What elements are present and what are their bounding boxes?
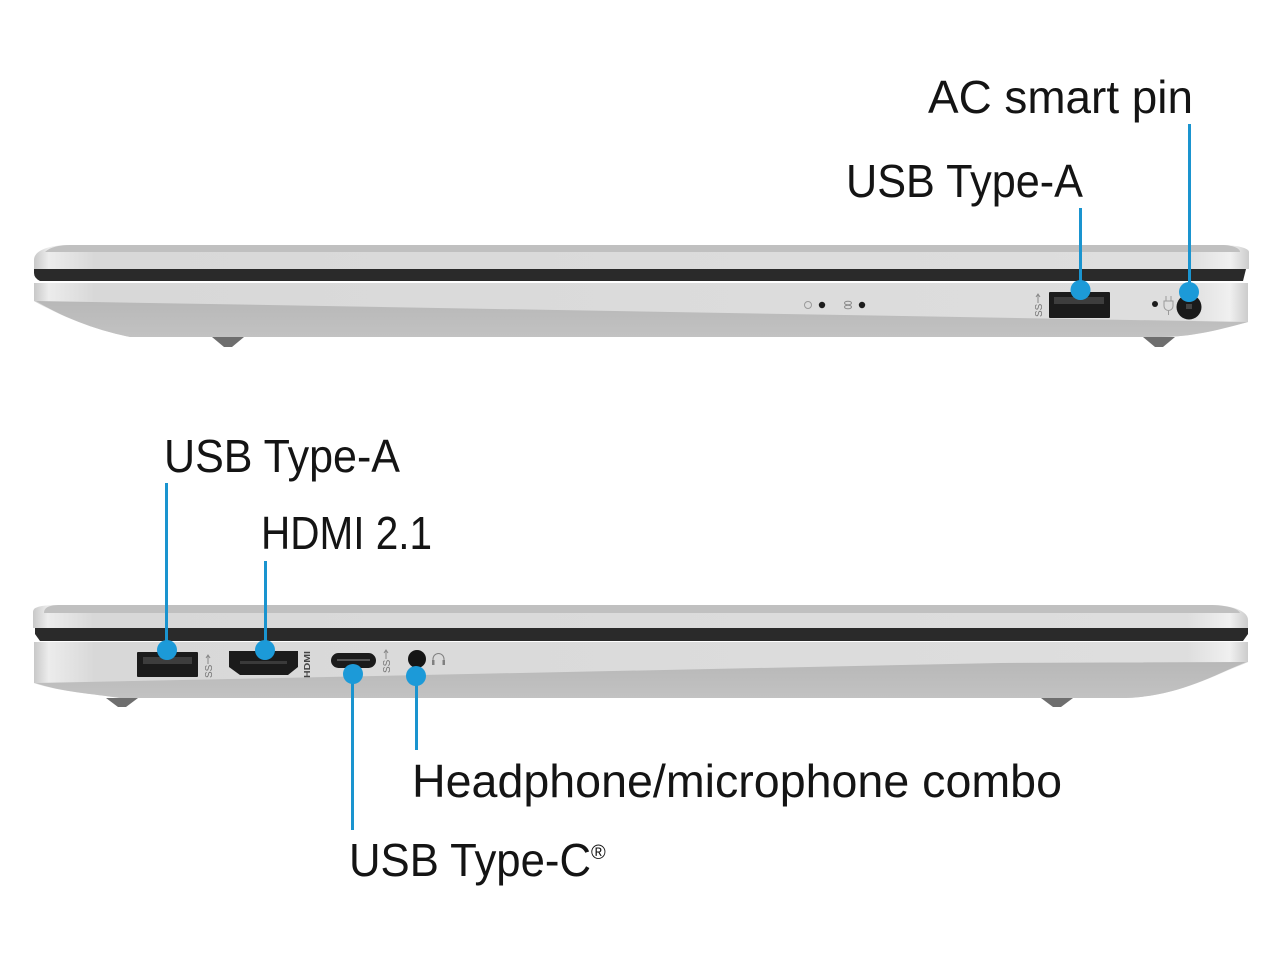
laptop: left side view (33, 483, 1248, 830)
label: HDMI 2.1: HDMI 2.1 (261, 507, 432, 559)
base (34, 283, 1248, 337)
callout line: USB Type-A (157, 483, 177, 660)
black hinge strip (34, 269, 1246, 281)
port: USB Type-A (1034, 292, 1110, 318)
base underside wedge (36, 301, 1248, 337)
lid top band (44, 605, 1240, 613)
callout line: AC smart pin (1179, 124, 1199, 302)
feet (212, 337, 1175, 347)
label: USB Type-A left: USB Type-A (164, 430, 400, 482)
callout line: USB Type-C (343, 664, 363, 830)
callout line: USB Type-A (1070, 208, 1090, 300)
lid (33, 605, 1248, 628)
port: USB Type-C: SS (382, 659, 393, 673)
laptop: right side view (34, 124, 1249, 347)
label: Headphone/microphone combo: Headphone/microphone combo (412, 755, 1062, 807)
LED indicators (804, 301, 865, 309)
port: USB Type-A (137, 652, 215, 678)
port: AC smart pin (1152, 294, 1202, 320)
port: HDMI (229, 651, 312, 678)
base underside wedge (36, 662, 1246, 698)
lid top band (45, 245, 1240, 252)
base (34, 642, 1248, 698)
port: HDMI: HDMI (303, 651, 312, 678)
feet (106, 698, 1073, 707)
port: USB Type-A: SS (1034, 303, 1045, 317)
black hinge strip (35, 628, 1248, 641)
lid (34, 245, 1249, 269)
label: USB Type-C: ® (591, 842, 606, 864)
port: headphone jack (408, 650, 445, 668)
label: AC smart pin: AC smart pin (928, 71, 1193, 123)
port: USB Type-C (331, 650, 393, 673)
callout line: headphone (406, 666, 426, 750)
label: USB Type-C: USB Type-C (349, 834, 591, 886)
callout line: HDMI (255, 561, 275, 660)
label: USB Type-A right: USB Type-A (846, 155, 1083, 207)
port: USB Type-A: SS (204, 664, 215, 678)
